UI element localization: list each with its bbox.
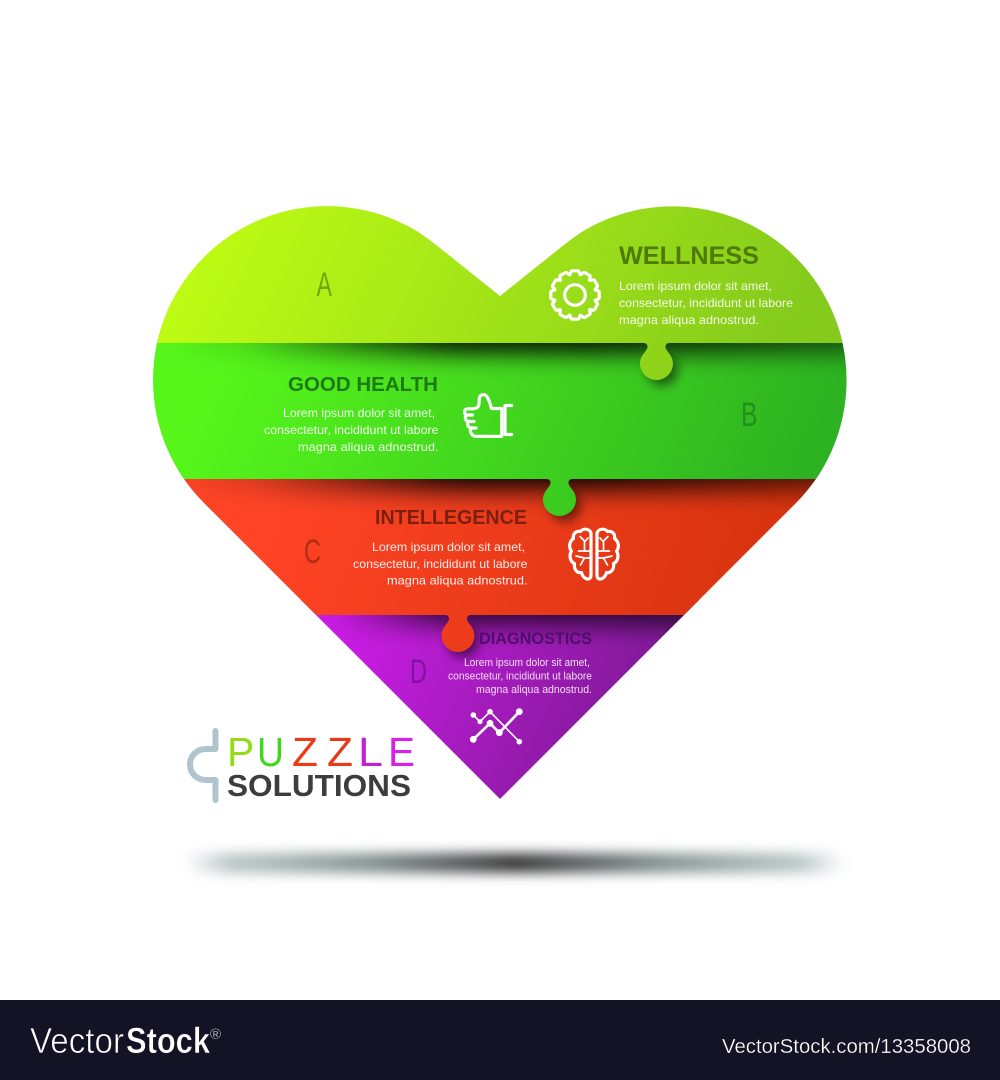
text block: good health: magna aliqua adnostrud. <box>298 440 438 454</box>
letter A: A <box>316 266 332 304</box>
shadow cast on band C <box>140 450 860 490</box>
text block: diagnostics <box>448 657 592 696</box>
footer brand: VectorStock: ® <box>210 1026 221 1043</box>
heading: good health: GOOD HEALTH <box>288 373 438 396</box>
letter D: D <box>410 653 427 691</box>
shadow cast on band B <box>140 315 860 353</box>
tab shadow on band C <box>549 490 581 522</box>
logo word: PUZZLE <box>227 729 415 775</box>
logo icon: puzzle connector <box>190 731 216 800</box>
logo: puzzle solutions <box>190 729 415 803</box>
tab shadow on band D <box>447 626 479 658</box>
icon: thumbs up <box>465 395 512 436</box>
panel: band B green with tab <box>140 330 860 516</box>
text block: wellness: consectetur, incididunt ut labore <box>619 296 793 310</box>
panel: band C red with tab <box>178 470 822 652</box>
ground shadow <box>185 853 845 873</box>
heart made of four puzzle bands <box>140 190 860 810</box>
letter C: C <box>304 533 321 571</box>
icon: gear <box>551 271 599 319</box>
letter B: B <box>741 396 758 434</box>
logo word: PUZZLE: P <box>227 729 254 775</box>
shadow cast on band D <box>300 585 700 626</box>
text block: good health: consectetur, incididunt ut labore <box>264 423 439 437</box>
logo word: PUZZLE: E <box>388 729 415 775</box>
text block: good health: Lorem ipsum dolor sit amet, <box>283 406 435 420</box>
panel: band A lime with tab <box>157 206 842 380</box>
logo word: PUZZLE: L <box>358 729 383 775</box>
footer brand: VectorStock: Vector <box>30 1020 124 1061</box>
heading: intellegence: INTELLEGENCE <box>375 506 527 529</box>
text block: diagnostics: magna aliqua adnostrud. <box>476 684 592 696</box>
text block: wellness: Lorem ipsum dolor sit amet, <box>619 279 772 293</box>
footer brand: VectorStock: Stock <box>126 1020 211 1061</box>
text block: intellegence: magna aliqua adnostrud. <box>387 574 528 588</box>
text block: wellness: magna aliqua adnostrud. <box>619 313 759 327</box>
text block: diagnostics: consectetur, incididunt ut labore <box>448 670 592 682</box>
text block: intellegence: consectetur, incididunt ut labore <box>353 557 528 571</box>
icon: brain <box>570 529 618 579</box>
text block: wellness <box>619 279 793 327</box>
tab shadow on band B <box>646 354 678 386</box>
footer image id: VectorStock.com/13358008 <box>722 1036 971 1058</box>
text block: intellegence: Lorem ipsum dolor sit amet, <box>372 540 525 554</box>
icon: line chart <box>470 708 523 744</box>
heading: wellness: WELLNESS <box>619 242 759 270</box>
heading: diagnostics: DIAGNOSTICS <box>479 630 592 648</box>
text block: good health <box>264 406 439 454</box>
logo word: SOLUTIONS: SOLUTIONS <box>227 768 411 803</box>
footer brand: VectorStock <box>30 1020 221 1061</box>
logo word: PUZZLE: Z <box>292 729 318 775</box>
footer bar <box>0 1000 1000 1080</box>
logo word: PUZZLE: U <box>257 729 284 775</box>
panel: band D purple <box>301 600 699 799</box>
text block: diagnostics: Lorem ipsum dolor sit amet, <box>464 657 590 669</box>
logo word: PUZZLE: Z <box>327 729 353 775</box>
text block: intellegence <box>353 540 528 588</box>
